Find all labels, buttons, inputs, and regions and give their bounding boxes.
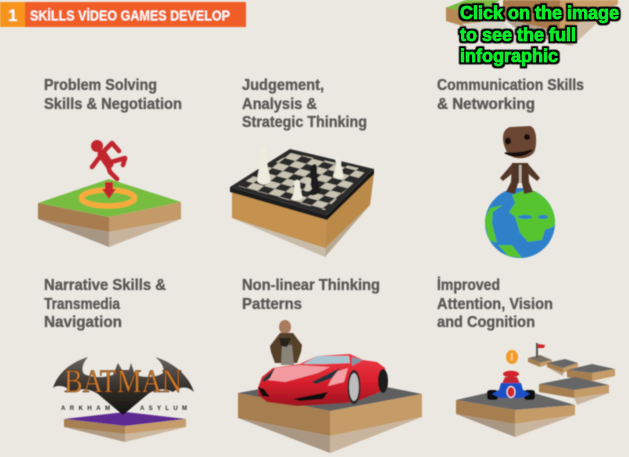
heading: Judgement (242, 77, 367, 131)
callout: click prompt: infographic (460, 46, 558, 66)
icon: Batman Arkham Asylum logo on purple platform: ASYLUM (140, 406, 187, 412)
platform 1 (456, 387, 575, 437)
man figure (270, 320, 302, 365)
heading: Improved attention: Attention, Vision (437, 296, 553, 313)
platform 3 (567, 364, 615, 386)
callout: click prompt: Click on the image (460, 3, 619, 23)
heading: Non-linear: Non-linear Thinking (242, 277, 380, 294)
heading: Improved attention: İmproved (437, 277, 500, 294)
section header banner: 1 (8, 6, 17, 25)
small platform 5 with flag (528, 343, 552, 367)
callout: click prompt: to see the full (460, 25, 576, 45)
heading: Narrative: Narrative Skills & (44, 277, 166, 294)
kart (487, 371, 535, 400)
icon: portal platform with falling figure (38, 140, 181, 247)
section header banner (0, 2, 246, 27)
platform 4 (547, 359, 578, 376)
heading: Non-linear: Patterns (242, 296, 302, 313)
icon: Batman Arkham Asylum logo on purple platform: ARKHAM (61, 406, 110, 412)
heading: Communication (437, 77, 584, 113)
heading: Communication: & Networking (437, 96, 535, 113)
cropped teaser platform, top right (445, 0, 618, 46)
platform 2 (539, 377, 609, 405)
icon: kart on stepping platforms (456, 343, 615, 437)
heading: Problem Solving (44, 77, 182, 113)
heading: Judgement: Analysis & (242, 96, 317, 113)
icon: Batman Arkham Asylum logo on purple platform (53, 357, 194, 442)
car body (258, 354, 388, 406)
heading: Improved attention: and Cognition (437, 314, 535, 331)
icon: Batman Arkham Asylum logo on purple platform: BATMAN (64, 364, 182, 400)
icon: red sports car with man on platform (238, 320, 422, 453)
icon: sackboy on globe (484, 126, 556, 258)
heading: Narrative (44, 277, 166, 331)
section header banner: SKİLLS VİDEO GAMES DEVELOP (30, 8, 230, 24)
heading: Narrative: Transmedia (44, 296, 120, 313)
heading: Judgement: Judgement, (242, 77, 324, 94)
heading: Improved attention (437, 277, 553, 331)
heading: Communication: Communication Skills (437, 77, 584, 94)
icon: chess board platform (230, 146, 374, 257)
heading: Narrative: Navigation (44, 314, 122, 331)
callout: click prompt (460, 3, 619, 66)
heading: Judgement: Strategic Thinking (242, 114, 367, 131)
heading: Problem Solving: Problem Solving (44, 77, 157, 94)
heading: Non-linear (242, 277, 380, 313)
heading: Problem Solving: Skills & Negotiation (44, 96, 182, 113)
